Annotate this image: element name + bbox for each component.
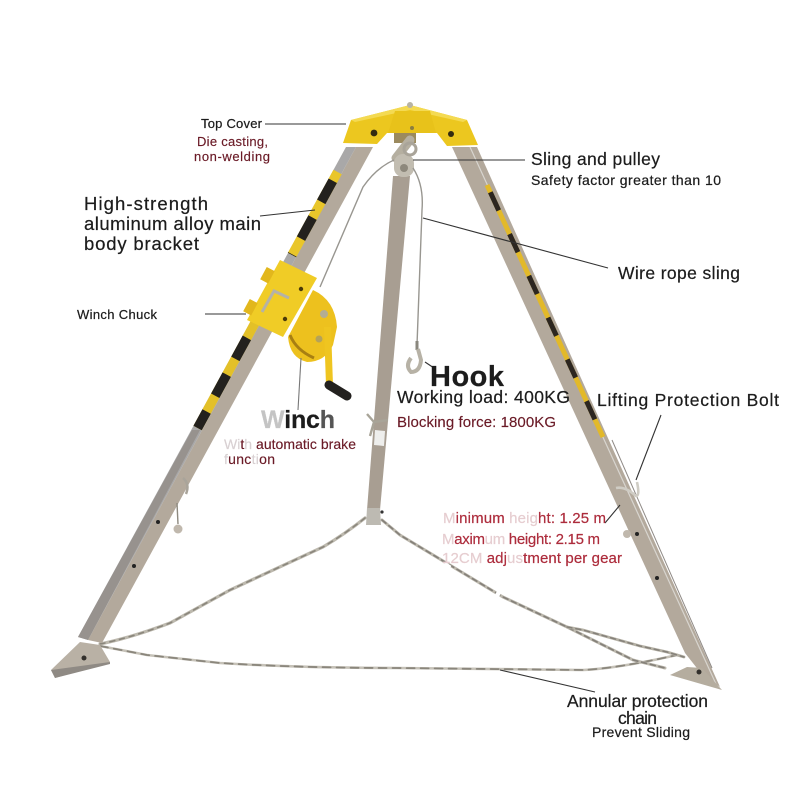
- right leg hazard stripe: [487, 185, 603, 437]
- label: annular protection chain: Annular protection: [567, 691, 708, 711]
- hook: [408, 341, 421, 372]
- label: sling and pulley: Sling and pulley: [531, 149, 660, 169]
- label: height adjustment: 12CM adjustment per gear: [442, 550, 622, 567]
- label: main body bracket: aluminum alloy main: [84, 213, 261, 234]
- top cover: [343, 102, 478, 146]
- label: winch: function: [224, 451, 275, 467]
- label: winch: [224, 406, 356, 467]
- label: hook: Hook: [430, 361, 505, 393]
- label: hook: Blocking force: 1800KG: [397, 414, 556, 431]
- label: sling and pulley: Safety factor greater than 10: [531, 172, 721, 188]
- centre leg: [366, 176, 410, 525]
- label: hook: [397, 361, 570, 431]
- sling and pulley: [394, 133, 416, 177]
- label: winch: With automatic brake: [224, 436, 356, 452]
- left leg hazard stripes: [198, 172, 338, 428]
- label: annular protection chain: [567, 691, 708, 740]
- label: hook: Working load: 400KG: [397, 387, 570, 407]
- tripod illustration: [51, 102, 722, 690]
- label: main body bracket: body bracket: [84, 233, 199, 254]
- label: annular protection chain: chain: [618, 708, 657, 728]
- label: winch chuck: Winch Chuck: [77, 307, 158, 322]
- label: annular protection chain: Prevent Sliding: [592, 724, 690, 740]
- label: height adjustment: Minimum height: 1.25 m: [443, 510, 606, 527]
- label: wire rope sling: Wire rope sling: [618, 263, 740, 283]
- label: top cover: Die casting,: [197, 134, 268, 149]
- chains: [100, 518, 684, 670]
- label: top cover: non-welding: [194, 149, 270, 164]
- leader lines: [205, 124, 661, 692]
- right leg: [452, 147, 722, 690]
- label: height adjustment: [442, 510, 622, 567]
- label: top cover: Top Cover: [201, 116, 263, 131]
- wire rope: [320, 160, 422, 345]
- winch: [243, 260, 347, 396]
- label: main body bracket: High-strength: [84, 193, 208, 214]
- label: height adjustment: Maximum height: 2.15 m: [442, 531, 600, 548]
- label: lifting protection bolt: Lifting Protection Bolt: [597, 390, 779, 410]
- left leg: [51, 147, 373, 678]
- label: main body bracket: [84, 193, 261, 254]
- label: sling and pulley: [531, 149, 721, 188]
- label: winch: Winch: [261, 406, 335, 434]
- label: top cover: [194, 116, 270, 164]
